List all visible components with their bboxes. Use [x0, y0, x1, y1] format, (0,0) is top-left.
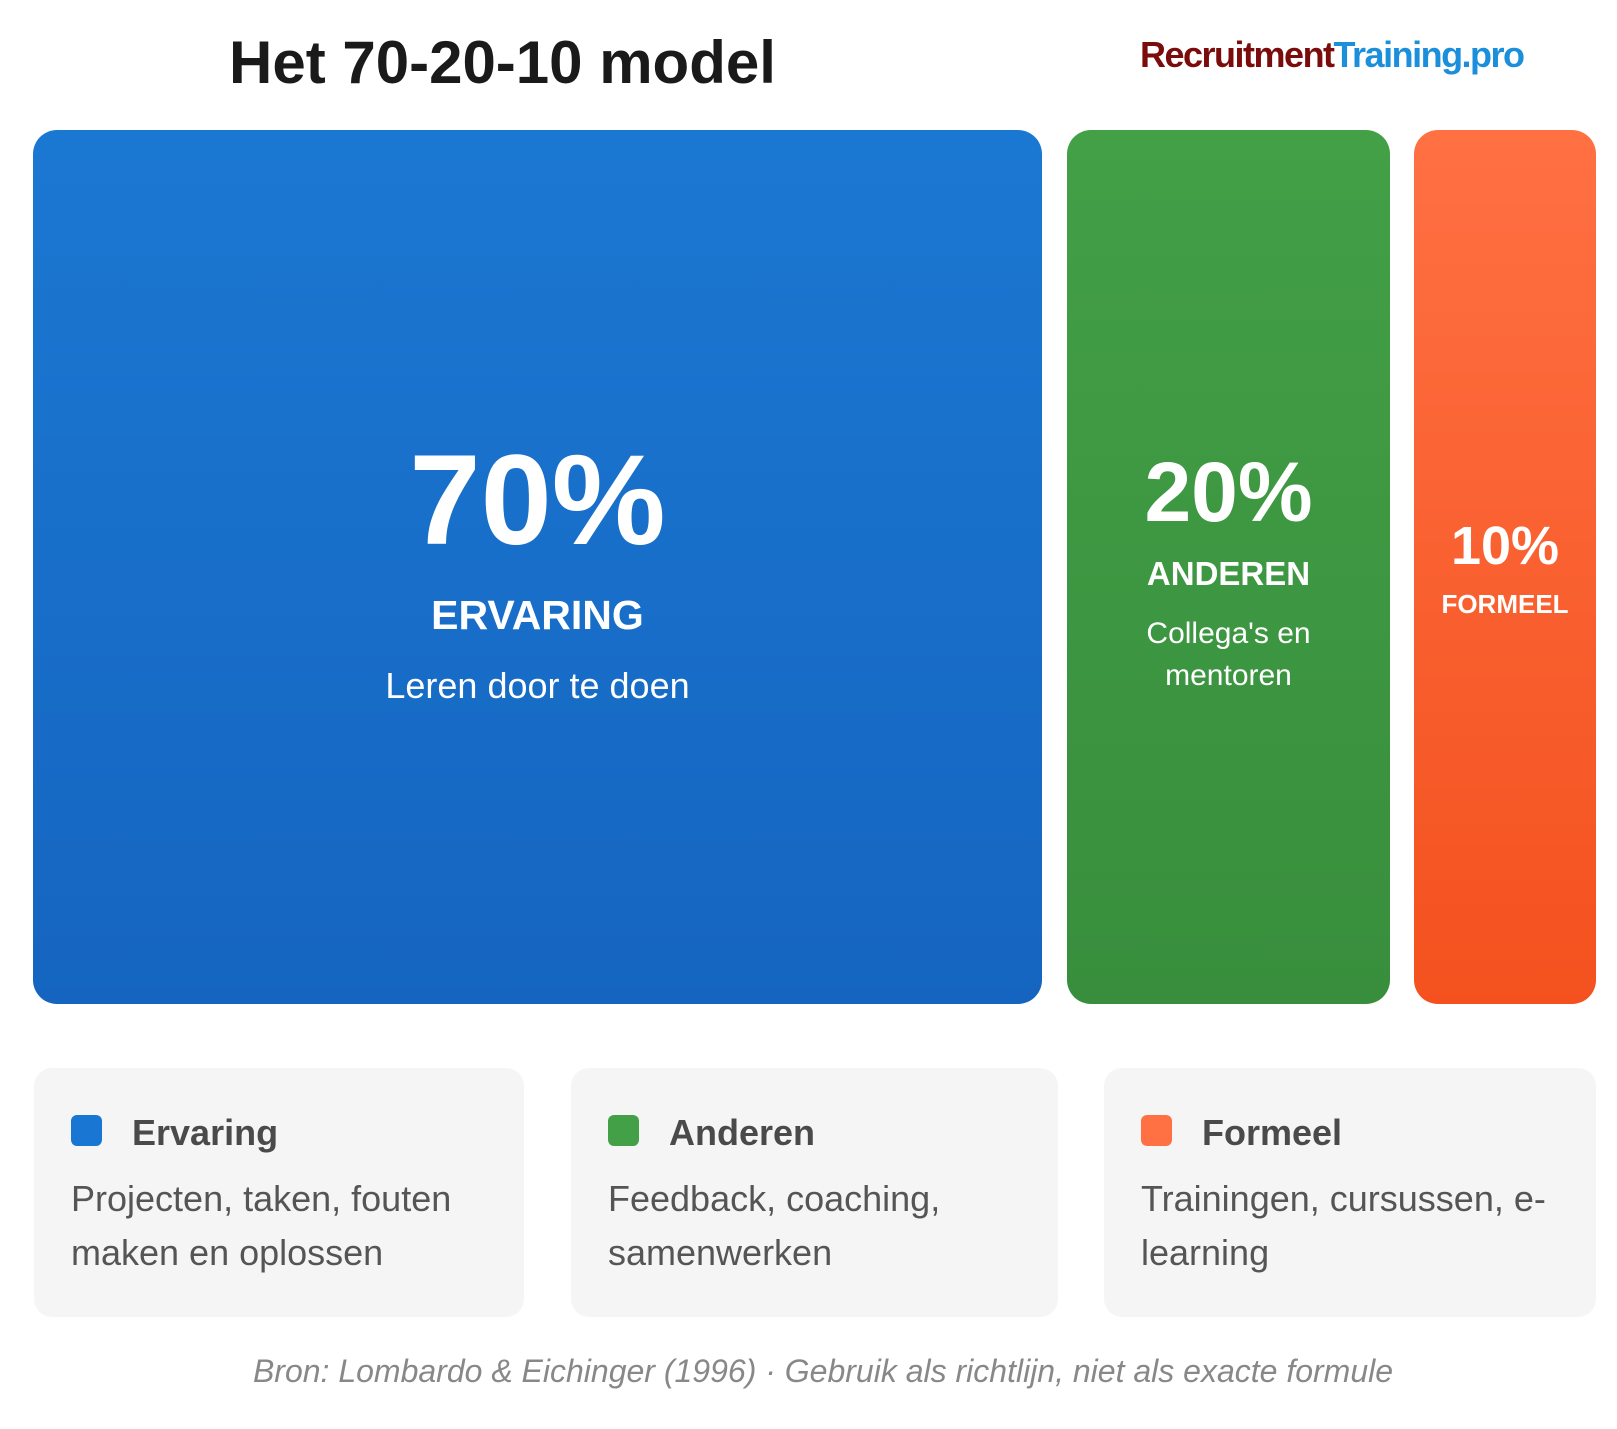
icon: green square	[608, 1115, 639, 1146]
legend card: formeel	[1104, 1068, 1596, 1317]
number 10%: 10%	[1451, 516, 1559, 576]
number 20%: 20%	[1144, 445, 1313, 539]
label ERVARING: ERVARING	[431, 592, 644, 638]
panel: 20% anderen	[1067, 130, 1390, 1004]
legend title: Ervaring	[132, 1112, 278, 1153]
label FORMEEL: FORMEEL	[1441, 589, 1569, 619]
legend title: Anderen	[669, 1112, 815, 1153]
title: Het 70-20-10 model	[229, 29, 776, 96]
legend card: anderen	[571, 1068, 1058, 1317]
legend text: Projecten, taken, fouten maken en oplossen	[71, 1178, 451, 1273]
big number 70%: 70%	[409, 429, 666, 572]
legend text: Trainingen, cursussen, e-learning	[1141, 1178, 1546, 1273]
legend text: Feedback, coaching, samenwerken	[608, 1178, 940, 1273]
subtext: Collega's en	[1146, 617, 1311, 650]
icon: orange square	[1141, 1115, 1172, 1146]
logo: RecruitmentTraining.pro	[1140, 34, 1524, 75]
label ANDEREN: ANDEREN	[1147, 555, 1310, 592]
panel: 10% formeel	[1414, 130, 1596, 1004]
legend card: ervaring	[34, 1068, 524, 1317]
subtext	[1146, 617, 1311, 692]
icon: blue square	[71, 1115, 102, 1146]
footer source: Bron: Lombardo & Eichinger (1996) · Gebruik als richtlijn, niet als exacte formule	[253, 1353, 1393, 1389]
legend title: Formeel	[1202, 1112, 1342, 1153]
panel: 70% ervaring	[33, 130, 1042, 1004]
subtext: mentoren	[1165, 659, 1292, 692]
subtext: Leren door te doen	[385, 665, 690, 706]
